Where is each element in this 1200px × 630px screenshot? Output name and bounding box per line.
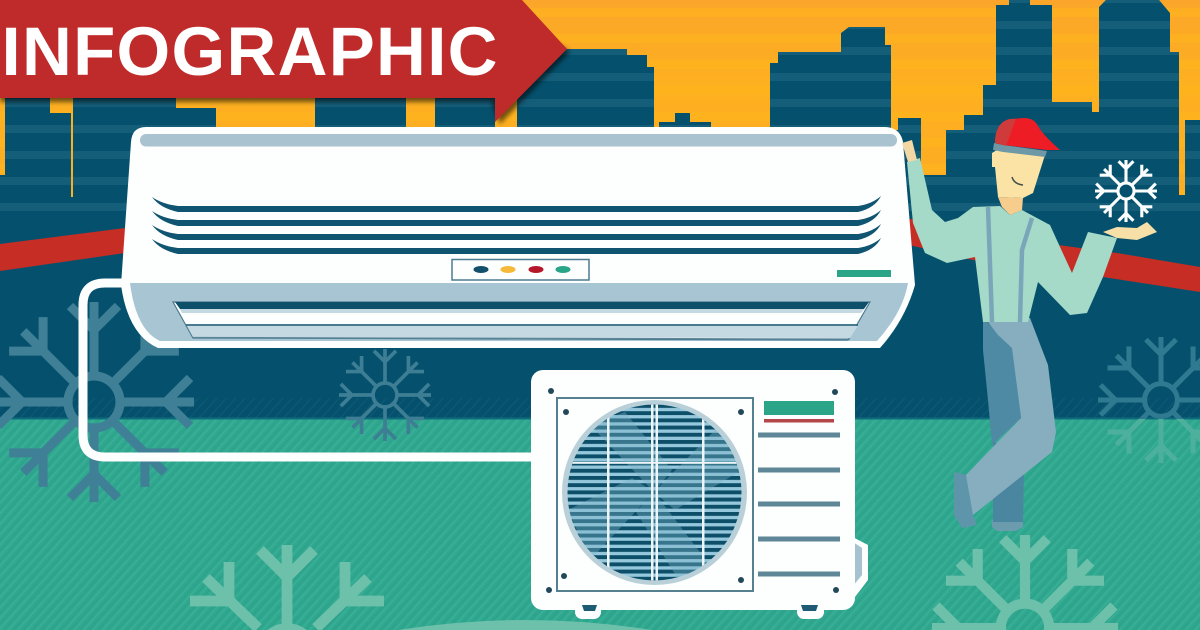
side valve cover <box>845 533 868 597</box>
neck <box>998 197 1023 215</box>
background: orange sky <box>0 0 1200 240</box>
banner arrow <box>0 0 567 122</box>
back leg <box>993 440 1024 522</box>
red cap <box>995 118 1060 150</box>
side slats <box>758 432 840 576</box>
snowflake: white held by technician <box>1095 160 1157 222</box>
label plate <box>764 401 834 422</box>
ground <box>0 398 1200 630</box>
banner title: INFOGRAPHIC <box>2 13 498 90</box>
front leg <box>966 318 1056 515</box>
technician <box>902 118 1157 531</box>
suspenders <box>988 207 1032 322</box>
snowflake: small centre <box>339 349 431 441</box>
snowflake: right <box>1098 337 1200 463</box>
fan <box>560 400 750 590</box>
indoor air conditioner unit <box>121 127 915 348</box>
top bar <box>140 134 897 146</box>
left hand <box>902 140 917 162</box>
foot slots <box>582 605 818 611</box>
banner <box>0 0 570 124</box>
front panel <box>557 398 753 591</box>
unit body <box>121 127 915 348</box>
left shoe <box>954 472 977 528</box>
right hand <box>1103 222 1157 240</box>
unit casing <box>531 370 855 610</box>
green status bar <box>837 270 891 277</box>
lower grey section <box>130 283 908 341</box>
shirt <box>907 158 1117 322</box>
screws <box>546 388 839 593</box>
outdoor condenser unit <box>531 370 868 619</box>
right shoe <box>992 520 1023 531</box>
red ribbon <box>0 218 1200 292</box>
lower vent <box>173 302 870 340</box>
banner shadow <box>0 45 570 124</box>
snowflake: bottom right <box>932 535 1118 630</box>
upper shadow of trousers <box>983 318 1021 445</box>
head <box>992 150 1045 198</box>
feet <box>575 600 824 619</box>
snowflake: bottom left <box>190 545 384 630</box>
smile <box>1012 177 1023 185</box>
control panel <box>452 260 589 280</box>
upper louvers <box>152 196 881 254</box>
light mound at bottom edge <box>398 620 652 630</box>
background: city skyline <box>0 0 1200 240</box>
cap band <box>993 143 1047 157</box>
refrigerant pipe <box>83 283 540 457</box>
snowflake: large left <box>0 302 194 502</box>
